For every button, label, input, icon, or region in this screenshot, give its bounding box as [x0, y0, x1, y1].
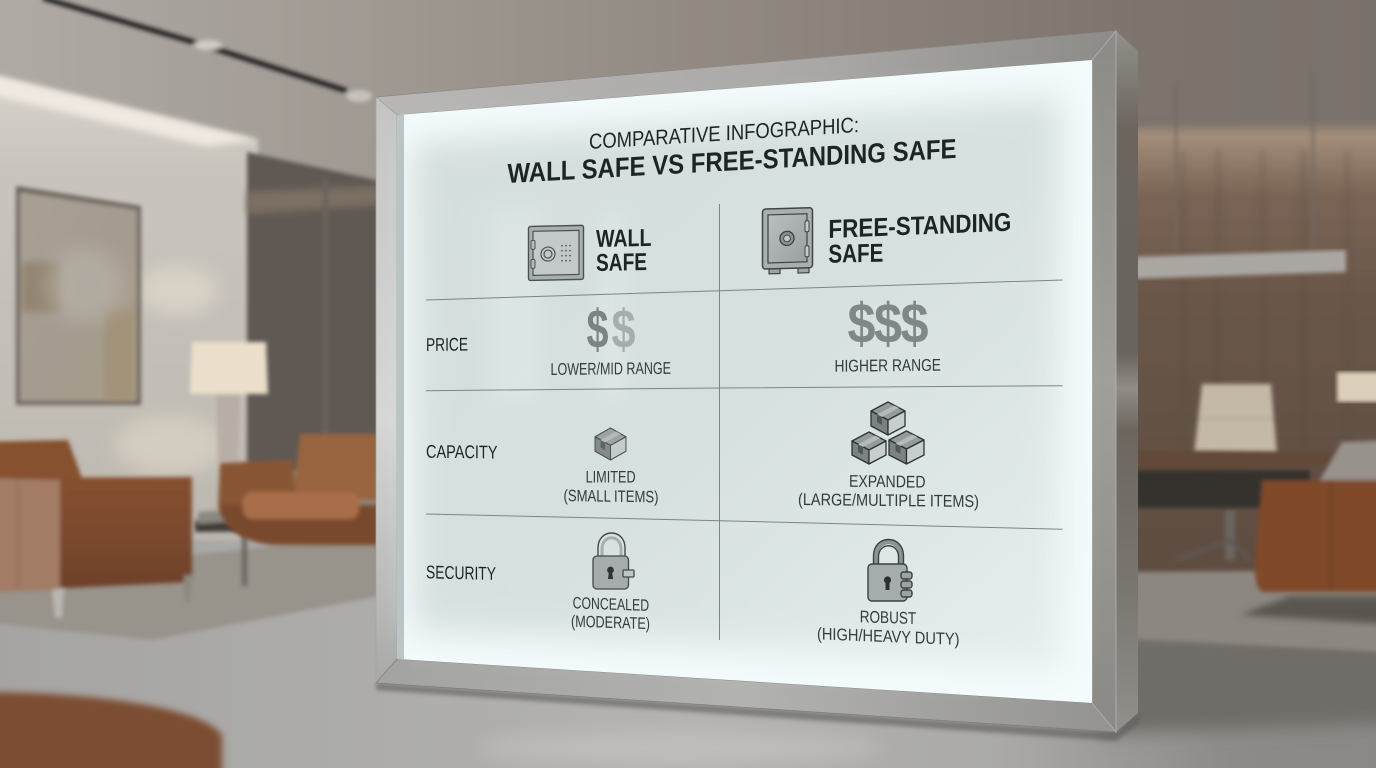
frame floor shadow [376, 683, 1140, 741]
icon: free-standing safe [762, 208, 812, 274]
icon: concealed padlock [593, 533, 634, 589]
row: security [426, 533, 960, 649]
wall painting [16, 186, 141, 405]
icon: robust padlock [868, 540, 912, 601]
subtitle: COMPARATIVE INFOGRAPHIC: [589, 113, 859, 154]
label: free-standing safe: SAFE [828, 238, 883, 269]
floor highlight under frame [480, 730, 880, 766]
value: expanded large/multiple items: (LARGE/MULTIPLE ITEMS) [798, 490, 979, 511]
label: free-standing safe: FREE-STANDING [828, 207, 1011, 244]
coffee table [195, 508, 375, 586]
left box [852, 432, 886, 464]
ceiling [0, 0, 1376, 220]
label: wall safe: WALL [596, 225, 652, 253]
label: free-standing safe [828, 207, 1011, 269]
glass reflections [490, 207, 625, 402]
top box [871, 402, 905, 435]
icon: single box [595, 428, 626, 460]
wall glow spots [115, 266, 225, 475]
sign frame: brushed metal [376, 31, 1138, 732]
right box [889, 431, 924, 464]
inner glass tone [412, 95, 1062, 668]
value: expanded large/multiple items [798, 472, 979, 511]
track light rail [43, 0, 372, 102]
linear pendant light [1130, 250, 1346, 279]
left wall [0, 72, 258, 540]
row label: price: PRICE [426, 334, 468, 355]
wood panel stripes [1180, 150, 1350, 450]
row: capacity [426, 402, 979, 511]
value: limited small items [564, 469, 658, 506]
glass panel [397, 60, 1092, 703]
hanging rods [1175, 72, 1314, 252]
column header: wall safe [528, 225, 652, 280]
sofa right [1255, 440, 1376, 592]
icon: three dollar signs: $ [848, 292, 876, 356]
row label: capacity: CAPACITY [426, 441, 498, 463]
value: robust high/heavy duty [817, 607, 960, 649]
value: higher range: HIGHER RANGE [834, 356, 941, 376]
value: concealed moderate: (MODERATE) [571, 613, 650, 633]
icon: three dollar signs: $ [900, 292, 928, 356]
row label: security: SECURITY [426, 561, 496, 584]
wood wall right [1125, 122, 1376, 578]
value: limited small items: LIMITED [586, 469, 636, 487]
icon: two dollar signs: $ [612, 298, 636, 360]
rug left [0, 535, 380, 640]
icon: two dollar signs [586, 298, 636, 360]
value: robust high/heavy duty: ROBUST [860, 607, 916, 628]
icon: three dollar signs: $ [874, 292, 902, 356]
label: wall safe: SAFE [596, 249, 647, 277]
grid lines [426, 204, 1063, 640]
lamp right [1337, 372, 1376, 402]
value: concealed moderate: CONCEALED [573, 594, 649, 615]
floor right [1100, 630, 1376, 734]
glowing edge [397, 60, 1092, 703]
rug right [1125, 570, 1376, 653]
column header: free-standing safe [762, 207, 1011, 274]
icon: wall safe [528, 225, 584, 280]
row: price [426, 292, 941, 379]
ottoman foreground [0, 692, 222, 768]
icon: two dollar signs: $ [586, 298, 608, 360]
floor lamp left [190, 342, 268, 462]
value: lower/mid range: LOWER/MID RANGE [550, 359, 671, 379]
armchair left [218, 434, 380, 545]
desk [1130, 450, 1332, 508]
office chair [1176, 384, 1277, 560]
left inner edge [397, 115, 404, 659]
value: expanded large/multiple items: EXPANDED [849, 472, 926, 492]
floor [0, 530, 1376, 768]
value: robust high/heavy duty: (HIGH/HEAVY DUTY) [817, 624, 960, 649]
label: wall safe [596, 225, 652, 277]
dark partition panel [247, 152, 380, 470]
value: concealed moderate [571, 594, 650, 633]
sofa left [0, 440, 192, 618]
icon: three dollar signs [848, 292, 928, 356]
frame left band [376, 97, 397, 683]
cove light strip [0, 72, 258, 146]
icon: three boxes [852, 402, 924, 464]
frame top band [376, 31, 1116, 115]
frame right band [1092, 31, 1116, 732]
main heading: WALL SAFE VS FREE-STANDING SAFE [508, 133, 956, 189]
frame bottom band [376, 659, 1116, 732]
frame side face [1116, 31, 1138, 732]
value: limited small items: (SMALL ITEMS) [564, 487, 658, 506]
title block [508, 113, 956, 189]
